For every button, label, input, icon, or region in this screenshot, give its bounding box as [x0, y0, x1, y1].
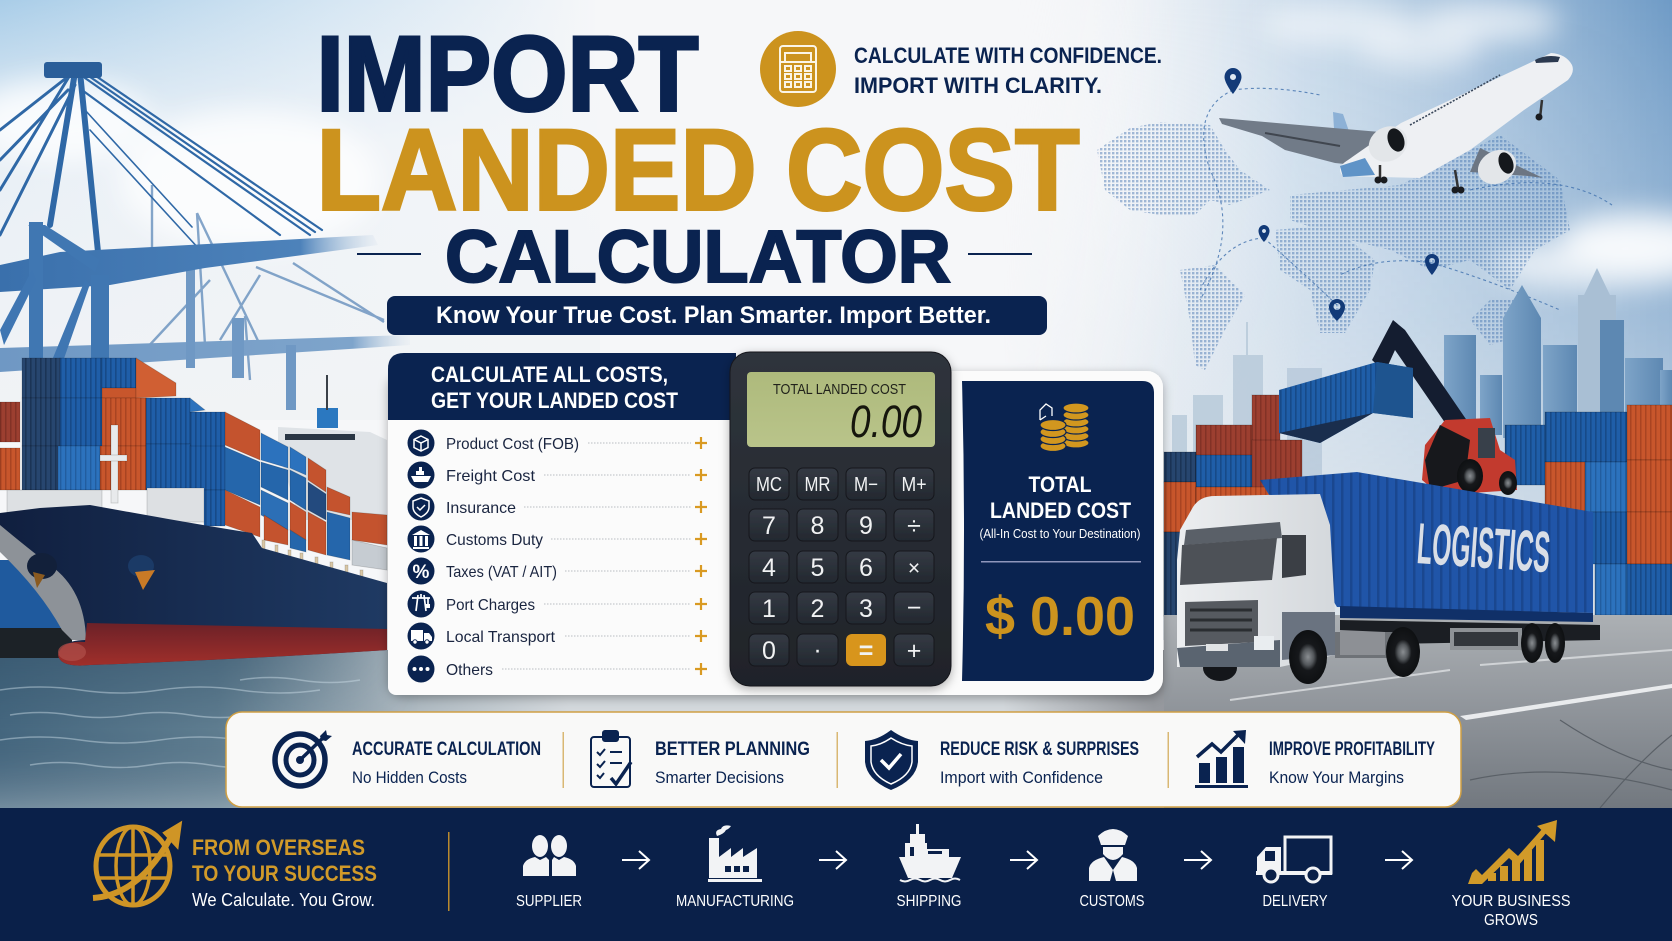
icon: gold growth chart — [1468, 820, 1557, 884]
item: taxes — [408, 558, 707, 584]
panel: cost list header: CALCULATE ALL COSTS, — [431, 362, 668, 387]
item: port charges — [408, 590, 707, 618]
benefit: improve profitability: IMPROVE PROFITABILITY — [1269, 739, 1435, 760]
list: cost items — [408, 430, 707, 682]
item: freight cost — [408, 462, 707, 488]
subtitle banner — [387, 296, 1047, 335]
step: manufacturing: MANUFACTURING — [676, 893, 794, 910]
illustration: container truck — [1177, 472, 1600, 684]
icon: truck — [1256, 837, 1332, 882]
icon: map pin africa — [1329, 299, 1345, 321]
calculator keypad: 9 — [859, 512, 873, 540]
arrow — [622, 851, 649, 869]
icon: map pin asia — [1425, 254, 1439, 275]
item: product cost — [408, 430, 707, 456]
panel: total landed cost: (All-In Cost to Your Destination) — [980, 526, 1140, 541]
calculator keypad: 0 — [762, 637, 776, 665]
calculator keypad: − — [907, 594, 921, 622]
text: from overseas: FROM OVERSEAS — [192, 835, 365, 860]
illustration: port cranes — [0, 62, 410, 410]
benefit: better planning — [591, 731, 810, 787]
benefit: improve profitability: Know Your Margins — [1269, 768, 1404, 787]
item: local transport: Local Transport — [446, 629, 556, 646]
benefit: accurate calculation: ACCURATE CALCULATION — [352, 739, 541, 760]
calculator keypad: 4 — [762, 554, 776, 582]
title: import landed cost calculator — [316, 14, 1080, 298]
step: supplier — [516, 835, 582, 910]
calculator keypad: 2 — [811, 595, 824, 623]
step: shipping — [896, 824, 962, 910]
text: from overseas: We Calculate. You Grow. — [192, 890, 375, 910]
illustration: ship superstructure — [278, 375, 387, 520]
step: your business grows: GROWS — [1484, 912, 1538, 929]
step: customs: CUSTOMS — [1080, 893, 1144, 910]
illustration: container stacks behind truck — [1164, 395, 1672, 616]
step: shipping: SHIPPING — [896, 893, 962, 910]
item: insurance — [408, 494, 707, 520]
item: local transport — [408, 622, 707, 650]
icon: factory — [708, 825, 762, 882]
calculator display: TOTAL LANDED COST — [773, 381, 906, 398]
calculator keypad: · — [813, 636, 822, 664]
benefit: accurate calculation: No Hidden Costs — [352, 768, 467, 787]
item: port charges: Port Charges — [446, 597, 535, 614]
step: your business grows — [1452, 820, 1570, 929]
item: freight cost: Freight Cost — [446, 468, 536, 485]
subtitle banner: Know Your True Cost. Plan Smarter. Import Better. — [436, 302, 991, 329]
calculator — [730, 352, 951, 686]
calculator keypad: MR — [804, 474, 830, 496]
calculator keypad: ÷ — [907, 512, 921, 540]
calculator keypad: MC — [756, 474, 782, 496]
benefit: improve profitability — [1195, 730, 1435, 788]
tagline: CALCULATE WITH CONFIDENCE. — [854, 43, 1162, 68]
illustration: water and ground strip — [0, 615, 1672, 808]
illustration: city skyline — [1172, 268, 1672, 515]
calculator keypad: M+ — [902, 474, 926, 496]
calculator keypad: 7 — [762, 512, 776, 540]
calculator keypad: = — [859, 637, 873, 665]
text: from overseas — [192, 835, 377, 910]
illustration: reach stacker with lifted container — [1279, 320, 1517, 495]
icon: gold coin stacks — [1040, 403, 1089, 452]
item: insurance: Insurance — [446, 500, 516, 517]
tagline — [854, 43, 1162, 98]
step: manufacturing — [676, 825, 794, 910]
panel: bottom process band — [0, 808, 1672, 941]
icon: gold globe with arrow — [93, 824, 180, 905]
illustration: stacked containers on ship — [0, 358, 387, 585]
illustration: airplane — [1219, 53, 1573, 194]
title line: IMPORT: IMPORT — [316, 14, 698, 134]
calculator keypad: + — [907, 637, 921, 665]
panel: total landed cost: TOTAL — [1028, 472, 1092, 497]
benefit: accurate calculation — [275, 730, 541, 787]
icon: people — [523, 835, 576, 876]
step: delivery — [1256, 837, 1332, 910]
item: taxes: Taxes (VAT / AIT) — [446, 564, 557, 581]
icon: customs officer — [1089, 829, 1137, 881]
title line: CALCULATOR: CALCULATOR — [445, 215, 951, 298]
text: from overseas: TO YOUR SUCCESS — [192, 861, 377, 886]
benefit: better planning: Smarter Decisions — [655, 768, 784, 787]
icon: bar chart with arrow — [1195, 730, 1248, 788]
step: your business grows: YOUR BUSINESS — [1452, 893, 1570, 910]
item: others: Others — [446, 662, 493, 679]
step: customs — [1080, 829, 1144, 910]
background: sky — [0, 0, 1672, 640]
title line: LANDED COST: LANDED COST — [316, 106, 1080, 234]
panel: total landed cost: $ 0.00 — [985, 585, 1135, 647]
panel: total landed cost: LANDED COST — [990, 498, 1131, 523]
panel: cost list header — [388, 353, 736, 420]
icon: map pin north america — [1224, 68, 1242, 94]
benefit: reduce risk: REDUCE RISK & SURPRISES — [940, 739, 1139, 760]
step: delivery: DELIVERY — [1262, 893, 1328, 910]
calculator display: 0.00 — [850, 396, 922, 447]
item: taxes: % — [413, 562, 430, 583]
calculator keypad: M− — [854, 474, 878, 496]
step: supplier: SUPPLIER — [516, 893, 582, 910]
benefit: reduce risk — [865, 730, 1139, 790]
panel: total landed cost — [962, 381, 1154, 681]
panel: calculator card — [388, 352, 1163, 695]
calculator keypad — [749, 468, 934, 666]
tagline: IMPORT WITH CLARITY. — [854, 73, 1102, 98]
arrow — [1184, 851, 1211, 869]
panel: benefits bar — [226, 712, 1461, 807]
icon: target — [275, 730, 332, 786]
item: others — [408, 656, 707, 682]
panel: cost list header: GET YOUR LANDED COST — [431, 388, 678, 413]
icon: map pin atlantic — [1258, 225, 1270, 242]
icon: clipboard — [591, 731, 631, 787]
calculator display — [747, 372, 935, 447]
illustration: dock at ship bow — [0, 560, 72, 658]
icon: shield with check — [865, 730, 918, 790]
arrow — [1385, 851, 1412, 869]
calculator keypad: 6 — [859, 554, 873, 582]
item: customs duty: Customs Duty — [446, 532, 543, 549]
icon: gold calculator badge — [760, 31, 836, 107]
item: product cost: Product Cost (FOB) — [446, 436, 579, 453]
arrow — [819, 851, 846, 869]
calculator keypad: × — [908, 557, 920, 580]
benefit: better planning: BETTER PLANNING — [655, 739, 810, 760]
benefit: reduce risk: Import with Confidence — [940, 768, 1103, 787]
illustration: dotted world map with routes and pins — [1097, 68, 1612, 370]
illustration: container ship hull — [0, 505, 387, 666]
calculator keypad: 1 — [762, 595, 776, 623]
arrow — [1010, 851, 1037, 869]
calculator keypad: 5 — [811, 554, 824, 582]
item: customs duty — [408, 526, 707, 552]
calculator keypad: 8 — [811, 512, 824, 540]
icon: ship — [899, 824, 961, 882]
calculator keypad: 3 — [859, 595, 873, 623]
